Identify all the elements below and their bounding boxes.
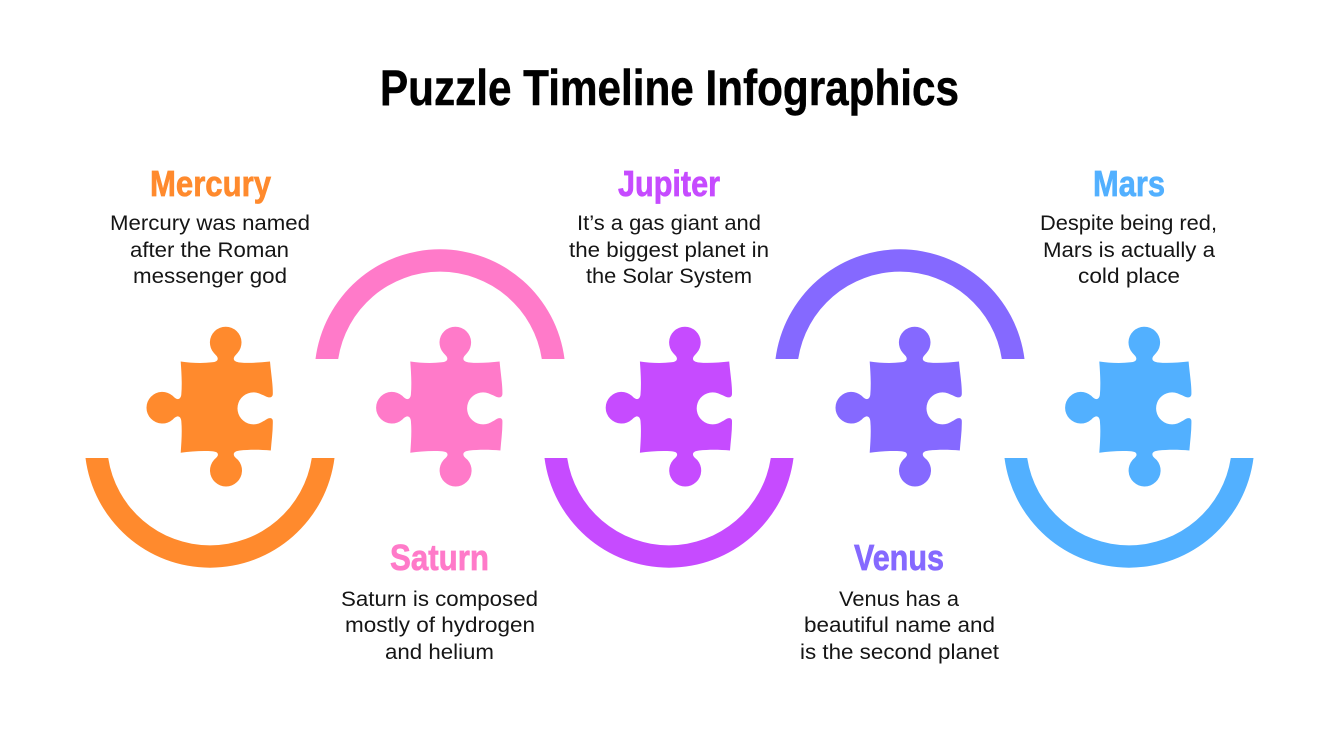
icon: orange puzzle piece	[146, 327, 273, 486]
text: Venus description	[800, 587, 999, 664]
text: Saturn description: and helium	[385, 640, 494, 664]
text: Saturn description: mostly of hydrogen	[345, 613, 535, 637]
text: Venus description: Venus has a	[839, 587, 959, 611]
icon: pink puzzle piece	[376, 327, 502, 486]
icon: violet puzzle piece	[835, 327, 962, 486]
panel: Venus	[776, 249, 1024, 664]
arc: pink upper	[316, 249, 564, 359]
text: Saturn description: Saturn is composed	[341, 587, 538, 611]
heading: Mercury: Mercury	[150, 163, 271, 204]
text: Mars description: Mars is actually a	[1043, 238, 1215, 262]
arc: orange lower	[86, 458, 334, 568]
text: Mercury description: messenger god	[133, 264, 287, 288]
panel: Saturn	[316, 249, 564, 664]
text: Jupiter description: It’s a gas giant and	[577, 211, 761, 235]
heading: Saturn: Saturn	[390, 537, 489, 578]
icon: purple puzzle piece	[606, 327, 732, 486]
text: Jupiter description: the Solar System	[586, 264, 752, 288]
panel: Mercury	[86, 163, 334, 568]
arc: purple lower	[544, 458, 794, 568]
text: Mars description: Despite being red,	[1040, 211, 1217, 235]
text: Jupiter description	[569, 211, 769, 288]
heading: Mars: Mars	[1093, 163, 1165, 204]
text: Venus description: is the second planet	[800, 640, 999, 664]
icon: blue puzzle piece	[1065, 327, 1191, 486]
heading: Venus: Venus	[854, 537, 944, 578]
text: Mercury description: after the Roman	[130, 238, 289, 262]
text: Venus description: beautiful name and	[804, 613, 995, 637]
text: Jupiter description: the biggest planet in	[569, 238, 769, 262]
arc: violet upper	[776, 249, 1024, 359]
panel: Mars	[1004, 163, 1254, 568]
panel: Jupiter	[544, 163, 794, 568]
text: Mercury description	[110, 211, 310, 288]
heading: Jupiter: Jupiter	[618, 163, 720, 204]
arc: blue lower	[1004, 458, 1254, 568]
text: Mercury description: Mercury was named	[110, 211, 310, 235]
text: Mars description	[1040, 211, 1217, 288]
text: Mars description: cold place	[1078, 264, 1180, 288]
text: Saturn description	[341, 587, 538, 664]
title: Puzzle Timeline Infographics	[380, 60, 959, 116]
